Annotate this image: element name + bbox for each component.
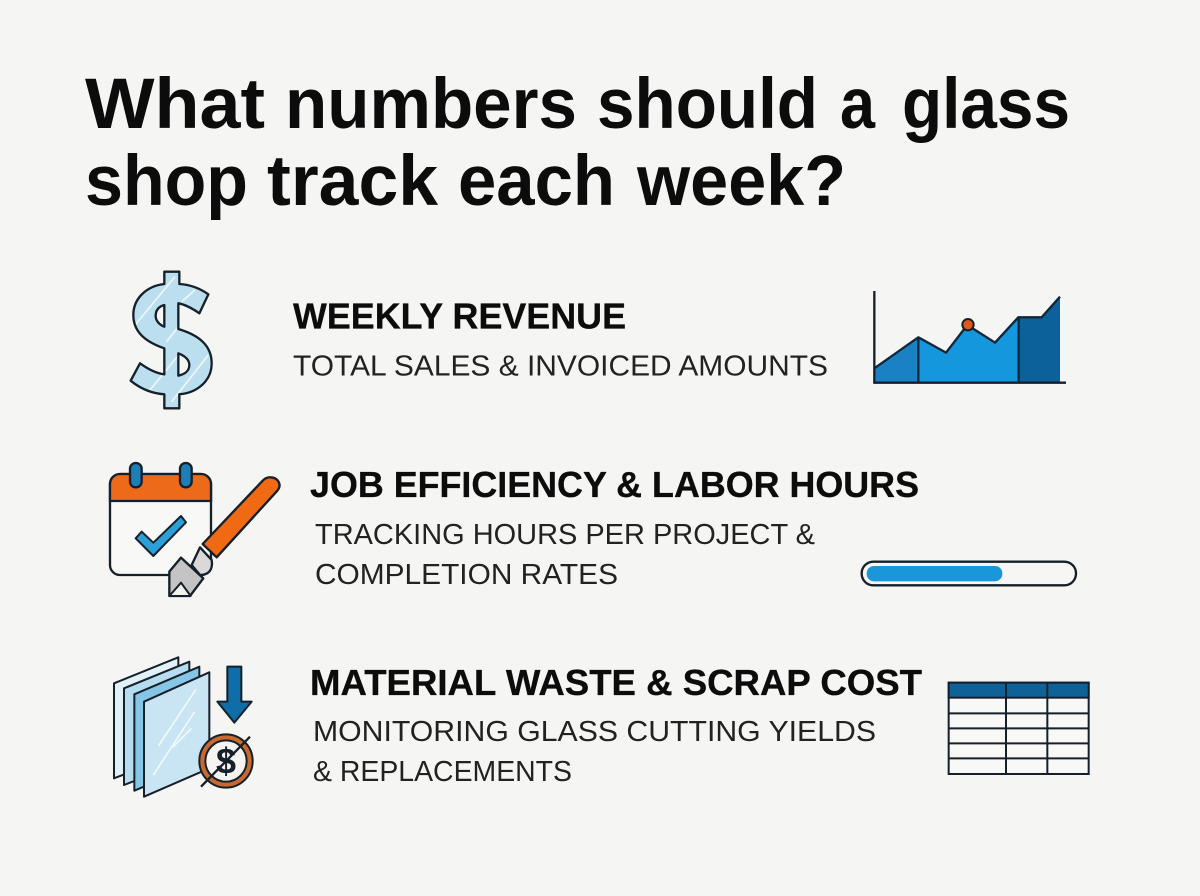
heading: material waste: MATERIAL WASTE & SCRAP COST (310, 662, 922, 703)
title: a (840, 65, 875, 144)
icon: glass dollar sign (131, 272, 212, 408)
title: shop (85, 142, 248, 221)
progress bar (862, 562, 1076, 585)
icon: calendar with glass cutter (110, 463, 279, 596)
heading: weekly revenue: WEEKLY REVENUE (293, 296, 626, 336)
title: glass (902, 65, 1070, 144)
table icon (949, 683, 1089, 774)
description: job efficiency (315, 519, 815, 591)
row: job efficiency (110, 463, 1076, 596)
title: should (597, 65, 818, 144)
chart: revenue area chart (874, 291, 1066, 383)
title: track (267, 142, 439, 221)
description: material waste: & REPLACEMENTS (313, 756, 572, 788)
icon: glass panes with no-dollar sign (114, 657, 253, 797)
description: material waste (313, 716, 876, 788)
description: job efficiency: COMPLETION RATES (315, 559, 618, 591)
description: material waste: MONITORING GLASS CUTTING YIELDS (313, 716, 876, 748)
row: weekly revenue (131, 272, 1066, 408)
icon: glass panes with no-dollar sign: $ (216, 740, 236, 781)
title: each (458, 142, 615, 221)
title: numbers (285, 65, 577, 144)
row: material waste (114, 657, 1089, 797)
title (85, 65, 1070, 221)
title: What (85, 65, 265, 144)
description: weekly revenue: TOTAL SALES & INVOICED AMOUNTS (293, 350, 828, 382)
heading: job efficiency: JOB EFFICIENCY & LABOR HOURS (310, 464, 919, 505)
title: week? (636, 142, 846, 221)
description: job efficiency: TRACKING HOURS PER PROJECT & (315, 519, 815, 551)
